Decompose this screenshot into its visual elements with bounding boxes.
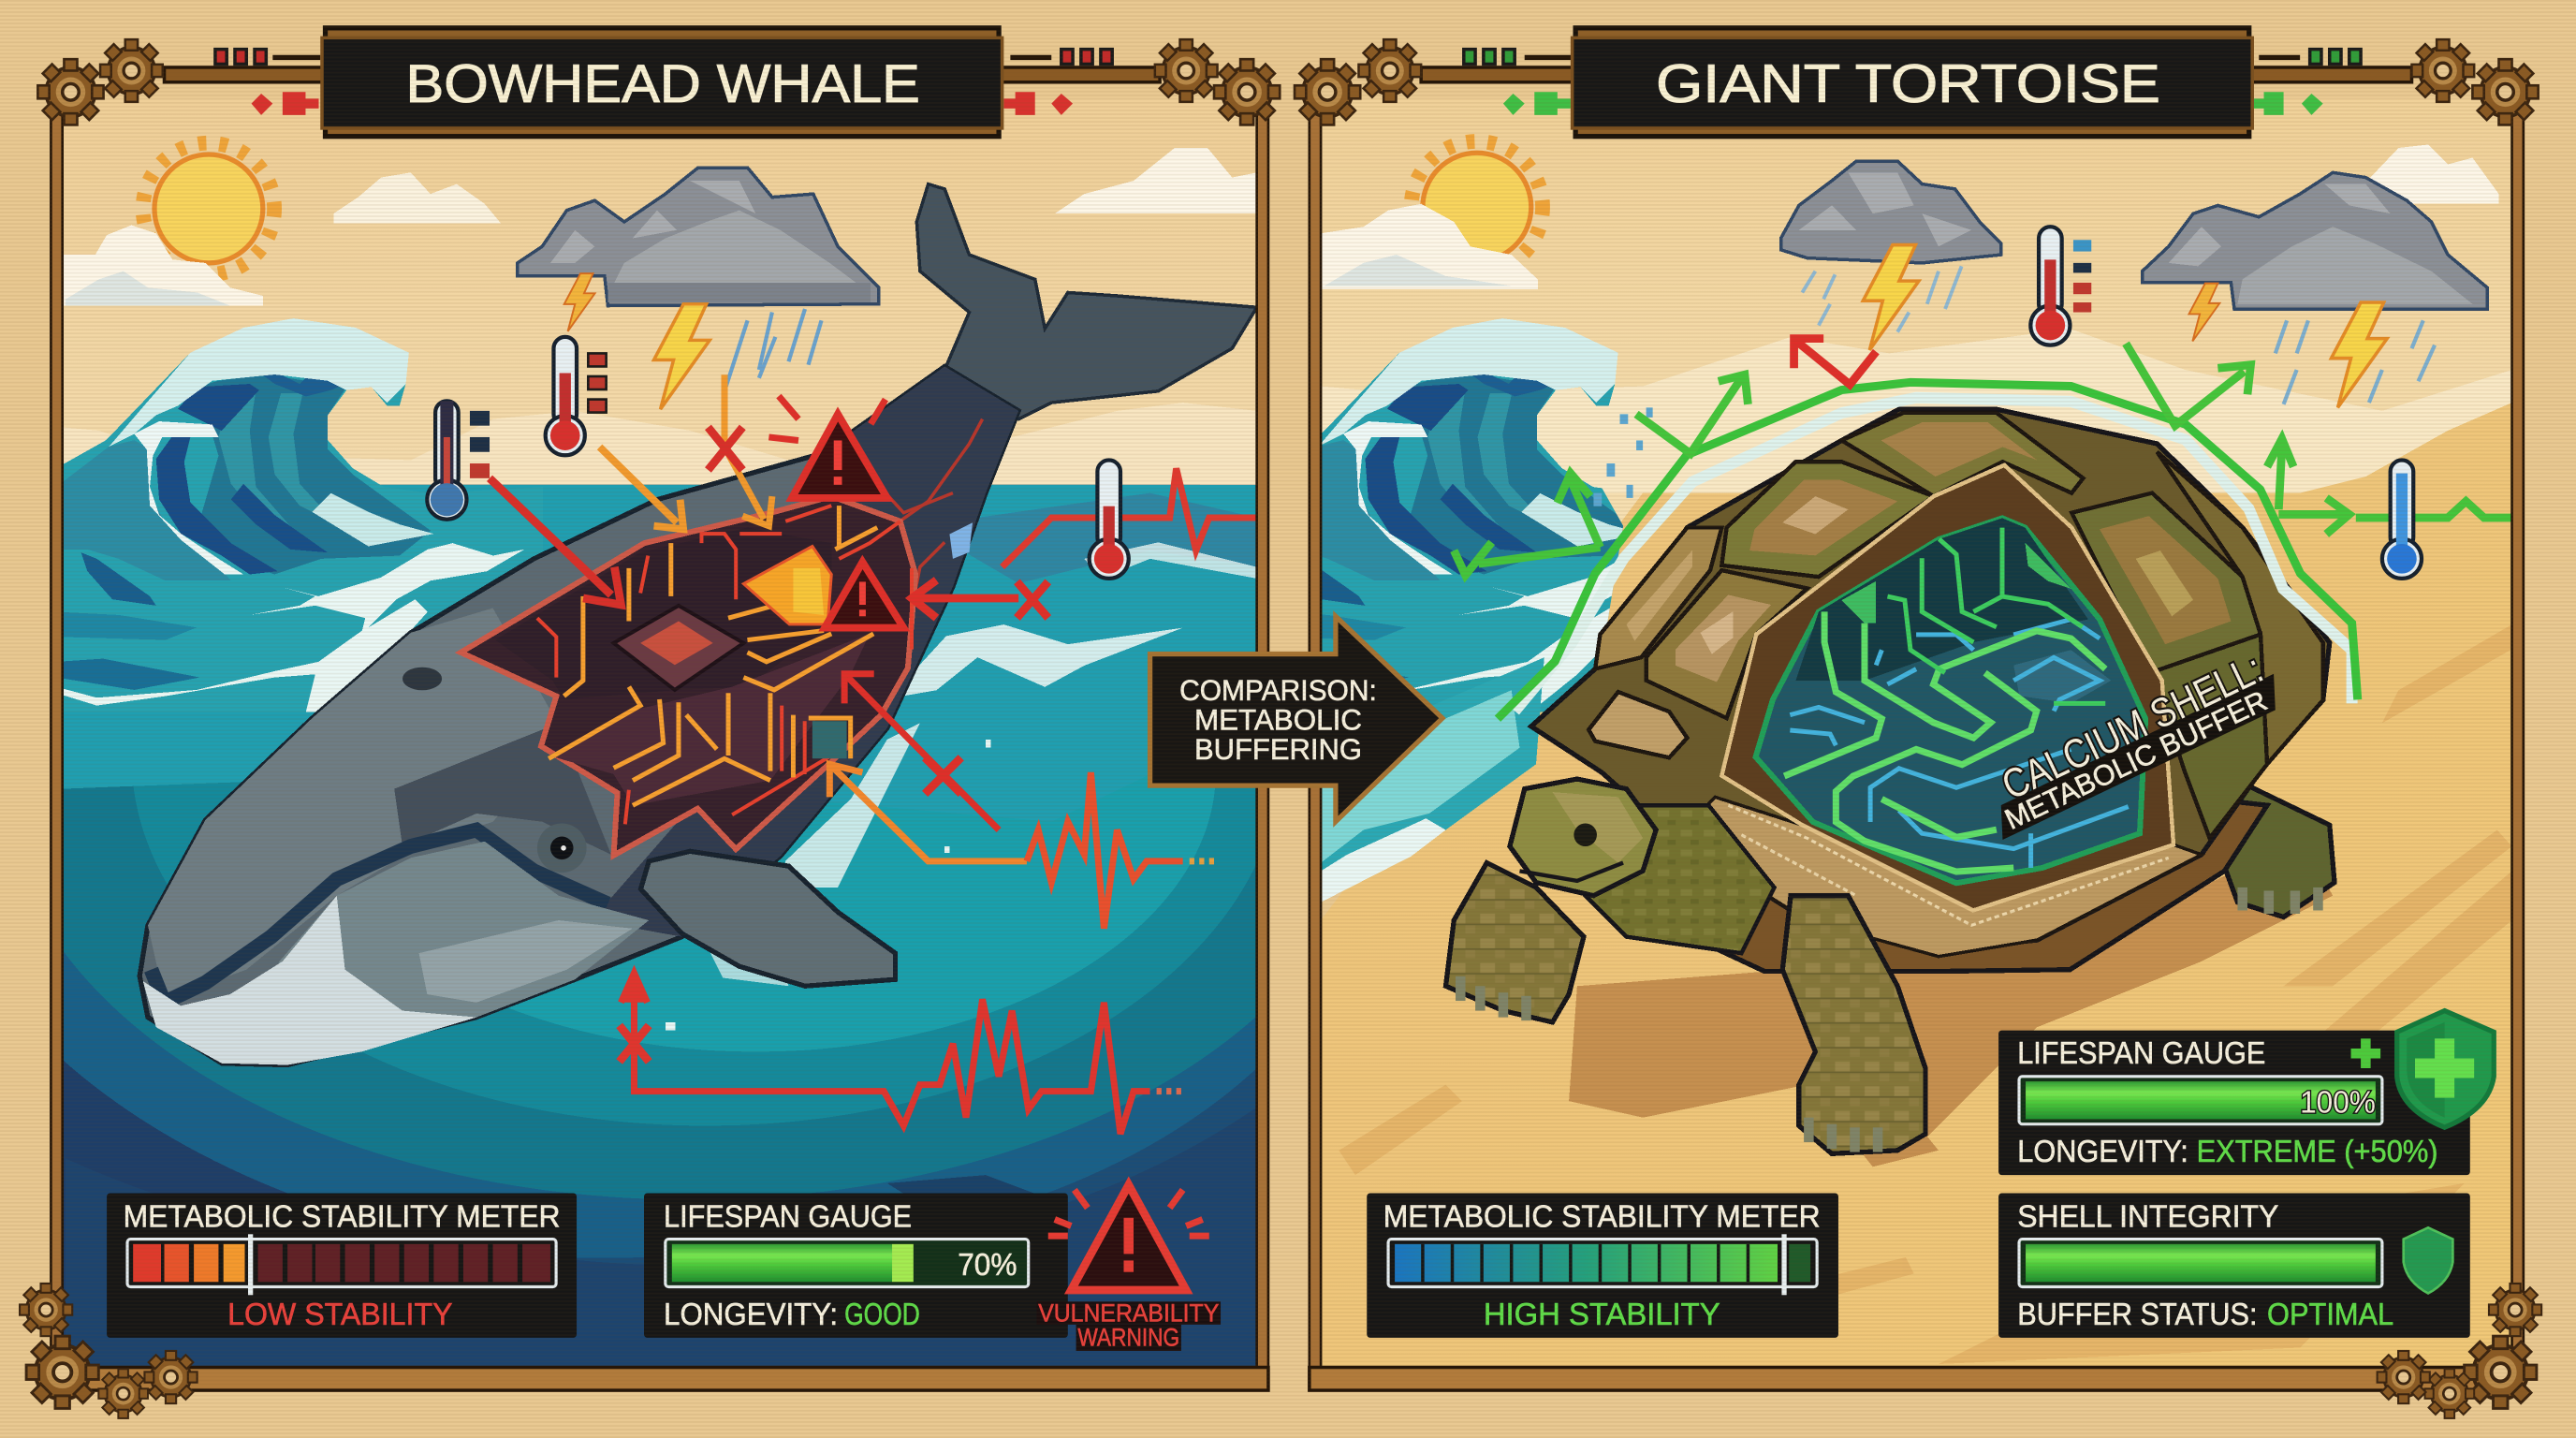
arrow: orange (600, 447, 683, 529)
panel: whale metabolic stability meter: METABOLIC STABILITY METER (124, 1199, 560, 1234)
panel: whale metabolic stability meter (107, 1193, 577, 1338)
title text: BOWHEAD WHALE (406, 54, 920, 114)
whale back and head (139, 366, 1018, 1065)
scute far right (2157, 452, 2323, 764)
tortoise (1445, 409, 2334, 1153)
whale body (139, 184, 1257, 1065)
comparison arrow: BUFFERING (1194, 732, 1362, 766)
big wave (56, 318, 543, 712)
panel: tortoise lifespan gauge: LIFESPAN GAUGE (2017, 1036, 2265, 1071)
thermometer 4 (2030, 227, 2091, 345)
title text: GIANT TORTOISE (1656, 54, 2160, 114)
lightning 1 with rain (1802, 245, 1962, 350)
cloud: white right (1055, 148, 1257, 213)
panel: bowhead whale scene (64, 135, 1256, 1366)
arrows: deflected green left (1454, 474, 1600, 575)
scute top (1841, 413, 2083, 496)
storm cloud 2 (2143, 172, 2487, 309)
warning triangle lower (825, 562, 903, 628)
shell dome (1531, 409, 2330, 950)
icon: sun (143, 143, 274, 274)
thermometer 1 (427, 401, 490, 520)
whale upper jaw (148, 609, 567, 999)
icon: large shield (2397, 1011, 2494, 1127)
whale blowhole (402, 668, 442, 690)
panel: tortoise lifespan gauge: LONGEVITY: (2017, 1135, 2188, 1169)
arrow: red blocked lower (844, 674, 999, 829)
panel: tortoise metabolic stability meter: METABOLIC STABILITY METER (1383, 1199, 1821, 1234)
panel: tortoise lifespan gauge: EXTREME (+50%) (2197, 1135, 2438, 1169)
circuit cutout (461, 496, 915, 856)
scute lower left (1588, 692, 1687, 757)
shell cutaway frame (1721, 465, 2174, 911)
toes (1456, 888, 2323, 1152)
sun (1412, 141, 1543, 272)
sky (1321, 98, 2512, 592)
cloud: white right (2364, 144, 2499, 204)
cloud: white left (63, 225, 263, 306)
sand shadow under tortoise (1569, 838, 2333, 1167)
callout: vulnerability warning: VULNERABILITY (1038, 1298, 1219, 1327)
warning triangle upper (768, 396, 887, 498)
rear leg (2219, 781, 2334, 917)
whale mouth line (151, 829, 607, 1003)
arrows: deflected green upper left (1636, 374, 1748, 453)
scute upper left (1721, 462, 1934, 577)
arrows and pulse: deflected green right (2267, 439, 2512, 535)
foam right of whale (666, 542, 1257, 1031)
thermometer 5 (2382, 461, 2422, 579)
front left leg (1445, 863, 1584, 1022)
circuit core chip (614, 606, 743, 690)
comparison arrow: METABOLIC (1194, 702, 1362, 736)
arrow: orange blocked (708, 374, 772, 526)
shell scutes (1588, 413, 2323, 838)
indicators: left panel (215, 50, 1112, 115)
arrow: deflected red (1794, 339, 1876, 385)
right frame (1310, 67, 2524, 1390)
panel: tortoise metabolic stability meter (1367, 1193, 1838, 1338)
panel: shell integrity: SHELL INTEGRITY (2017, 1199, 2278, 1234)
circuit window (1756, 518, 2145, 883)
head (1510, 779, 1656, 896)
title plaque: bowhead whale (322, 28, 1003, 137)
cloud: white small (333, 172, 501, 224)
panel: tortoise metabolic stability meter: HIGH STABILITY (1484, 1298, 1720, 1332)
arrow: red blocked from right (912, 580, 1048, 618)
banner: calcium shell: METABOLIC BUFFER (1999, 684, 2272, 836)
panel: shell integrity (1998, 1193, 2470, 1338)
arrows: deflected green upper right (2126, 344, 2250, 426)
title plaque: giant tortoise (1573, 28, 2252, 137)
scute right (2071, 493, 2261, 672)
tail cracks (871, 419, 983, 609)
cloud: white left (1321, 204, 1538, 289)
callout: vulnerability warning (1036, 1185, 1221, 1352)
arrow: red into chip (490, 478, 621, 605)
shell underside (1617, 772, 2267, 971)
panel: whale lifespan gauge: LONGEVITY: (664, 1298, 838, 1332)
panel: tortoise lifespan gauge: 100% (2300, 1085, 2376, 1120)
comparison arrow: COMPARISON: (1179, 673, 1377, 707)
sea and wave (1266, 318, 1752, 902)
sky (64, 136, 1256, 461)
panel: shell integrity: BUFFER STATUS: (2017, 1298, 2258, 1332)
storm cloud 1 (1781, 161, 2001, 263)
neck (1586, 805, 1775, 953)
horizon haze (1321, 329, 2512, 493)
panel: tortoise lifespan gauge (1998, 1031, 2470, 1175)
whale fluke (916, 184, 1257, 419)
panel: whale lifespan gauge (644, 1193, 1068, 1338)
thermometer 2 (546, 337, 607, 455)
whale lower jaw (278, 842, 649, 1017)
comparison arrow (1150, 616, 1442, 822)
indicators: right panel (1464, 50, 2361, 115)
hot spot (743, 547, 831, 624)
whale eye (537, 823, 587, 873)
icon: large lightning (654, 304, 710, 409)
panel: whale lifespan gauge: LIFESPAN GAUGE (664, 1199, 912, 1234)
sand (1321, 403, 2512, 1372)
banner: calcium shell: CALCIUM SHELL: (1995, 646, 2270, 809)
arrow: orange pulse line (829, 764, 1219, 929)
icon: ice chip (949, 522, 973, 559)
scute left (1647, 570, 1808, 718)
whale white belly (143, 896, 476, 1065)
thermometer 3 with pulse line (1003, 461, 1257, 579)
lightning small (2188, 284, 2219, 341)
panel: shell integrity: OPTIMAL (2267, 1298, 2393, 1332)
rain (726, 309, 822, 387)
distant haze clouds (63, 403, 1257, 493)
lightning large with rain (2276, 302, 2435, 407)
icon: small lightning (564, 273, 595, 331)
storm cloud (518, 168, 879, 306)
arrow: red pulse line bottom (620, 973, 1186, 1134)
sea (64, 485, 1256, 1366)
icon: small shield (2404, 1227, 2452, 1294)
callout: vulnerability warning: WARNING (1077, 1323, 1179, 1352)
scute far left (1595, 527, 1721, 668)
shell front rim (1676, 797, 2202, 957)
metabolic buffer dome (1498, 382, 2358, 719)
panel: whale metabolic stability meter: LOW STABILITY (227, 1298, 453, 1332)
whale flipper (640, 851, 896, 986)
panel: giant tortoise scene (1266, 98, 2512, 1372)
panel: whale lifespan gauge: GOOD (844, 1298, 920, 1332)
front right leg (1782, 896, 1925, 1153)
left frame (51, 67, 1268, 1390)
scute right lower (2152, 635, 2267, 838)
panel: whale lifespan gauge: 70% (958, 1248, 1017, 1283)
